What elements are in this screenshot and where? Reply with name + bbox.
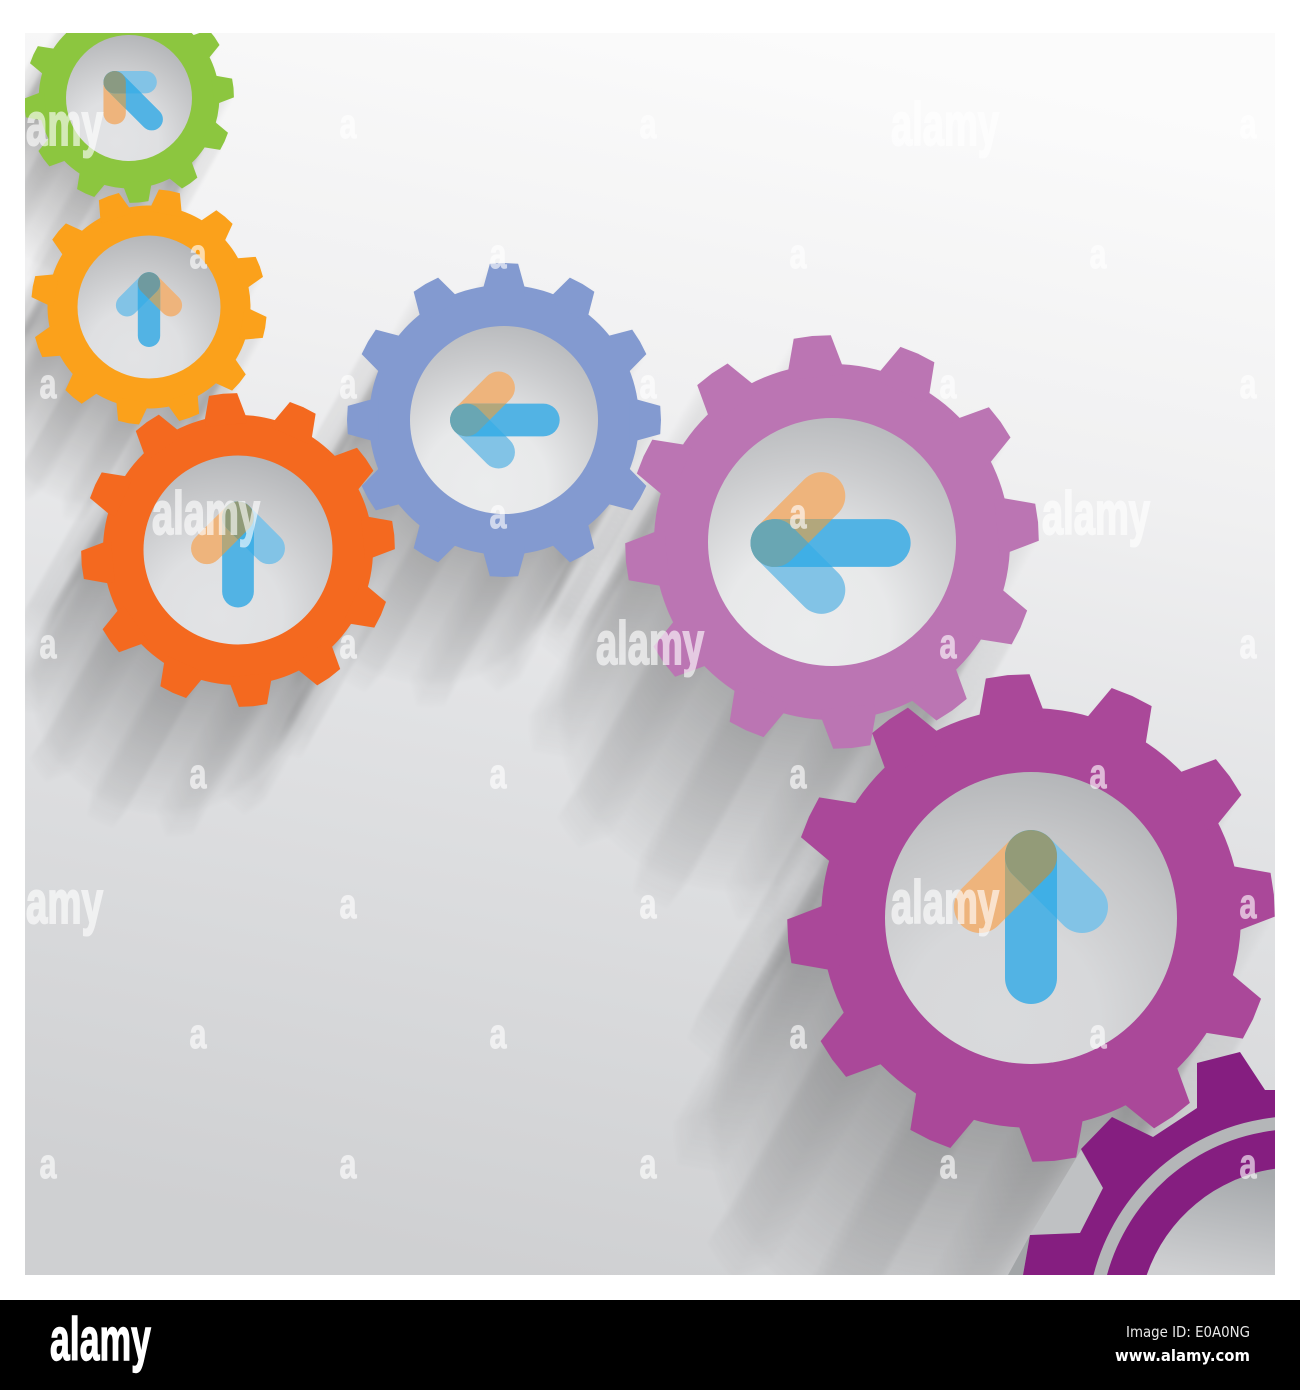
shadow beside dark purple gear (1030, 1150, 1103, 1235)
watermark: large wordmarks: alamy (1042, 480, 1150, 547)
watermark: small repeated letters: a (340, 100, 357, 147)
gear: magenta (765, 652, 1297, 1184)
watermark: small repeated letters: a (640, 360, 657, 407)
footer logo: alamy (50, 1306, 151, 1373)
hole of dark purple gear (1147, 1169, 1275, 1275)
watermark: small repeated letters: a (1090, 230, 1107, 277)
watermark: small repeated letters: a (790, 1010, 807, 1057)
watermark: small repeated letters: a (1240, 360, 1257, 407)
footer bar (0, 1300, 1300, 1390)
watermark: small repeated letters: a (1240, 1140, 1257, 1187)
watermark: small repeated letters (40, 245, 1258, 1179)
gear: dark purple, bottom right (1023, 1052, 1275, 1275)
watermark: small repeated letters: a (940, 620, 957, 667)
watermark: large wordmarks: alamy (596, 610, 704, 677)
arrow: left in blue gear (466, 388, 543, 452)
watermark: small repeated letters: a (190, 750, 207, 797)
watermark: small repeated letters: a (340, 1140, 357, 1187)
hole of magenta gear (885, 772, 1177, 1064)
watermark: small repeated letters: a (1090, 750, 1107, 797)
hole of orange gear (78, 236, 220, 378)
watermark: small repeated letters: a (790, 750, 807, 797)
gap ring in dark purple gear (1094, 1117, 1275, 1275)
watermark: small repeated letters: a (1240, 880, 1257, 927)
hole of blue gear (410, 326, 598, 514)
image id: Image ID: E0A0NG (1126, 1323, 1250, 1341)
watermark: small repeated letters: a (1040, 1260, 1057, 1307)
watermark: small repeated letters: a (640, 1140, 657, 1187)
website: www.alamy.com (1115, 1346, 1250, 1365)
watermark: small repeated letters: a (940, 360, 957, 407)
watermark: large wordmarks: alamy (152, 480, 260, 547)
watermark: small repeated letters: a (40, 620, 57, 667)
gear: blue (347, 263, 661, 577)
watermark: large wordmarks: alamy (891, 869, 999, 936)
watermark: small repeated letters: a (340, 620, 357, 667)
watermark: small repeated letters: a (340, 360, 357, 407)
watermark: small repeated letters: a (490, 1010, 507, 1057)
arrow: up in orange gear (127, 283, 171, 336)
watermark: small repeated letters: a (40, 1140, 57, 1187)
watermark: small repeated letters: a (1240, 620, 1257, 667)
hole of mauve gear (708, 418, 956, 666)
watermark: small repeated letters: a (190, 230, 207, 277)
watermark: small repeated letters: a (640, 880, 657, 927)
watermark: small repeated letters: a (790, 490, 807, 537)
watermark: small repeated letters: a (490, 750, 507, 797)
watermark: small repeated letters: a (190, 1010, 207, 1057)
watermark: small repeated letters: a (1240, 100, 1257, 147)
arrow: left in mauve gear (774, 496, 887, 590)
shadow sliver under dark purple gear tooth (1008, 1235, 1030, 1275)
watermark: small repeated letters: a (340, 880, 357, 927)
arrow: up in red-orange gear (207, 517, 269, 592)
hole of red-orange gear (144, 456, 332, 644)
watermark: small repeated letters: a (490, 490, 507, 537)
watermark: small repeated letters: a (640, 100, 657, 147)
watermark: small repeated letters: a (170, 1260, 187, 1307)
watermark: large wordmarks: alamy (891, 91, 999, 158)
arrow: up in magenta gear (980, 856, 1082, 978)
gear: mauve (606, 316, 1058, 768)
watermark: large wordmarks (0, 91, 1150, 936)
watermark: small repeated letters: a (1090, 1010, 1107, 1057)
watermark: small repeated letters: a (790, 230, 807, 277)
hole of green gear (66, 35, 192, 161)
gear: red-orange (67, 379, 409, 721)
gear: orange (12, 170, 286, 444)
watermark: small repeated letters: a (40, 360, 57, 407)
watermark: small repeated letters: a (940, 1140, 957, 1187)
gear: green (25, 33, 234, 203)
watermark: small repeated letters: a (490, 230, 507, 277)
arrow: up-left in green gear (104, 71, 163, 130)
